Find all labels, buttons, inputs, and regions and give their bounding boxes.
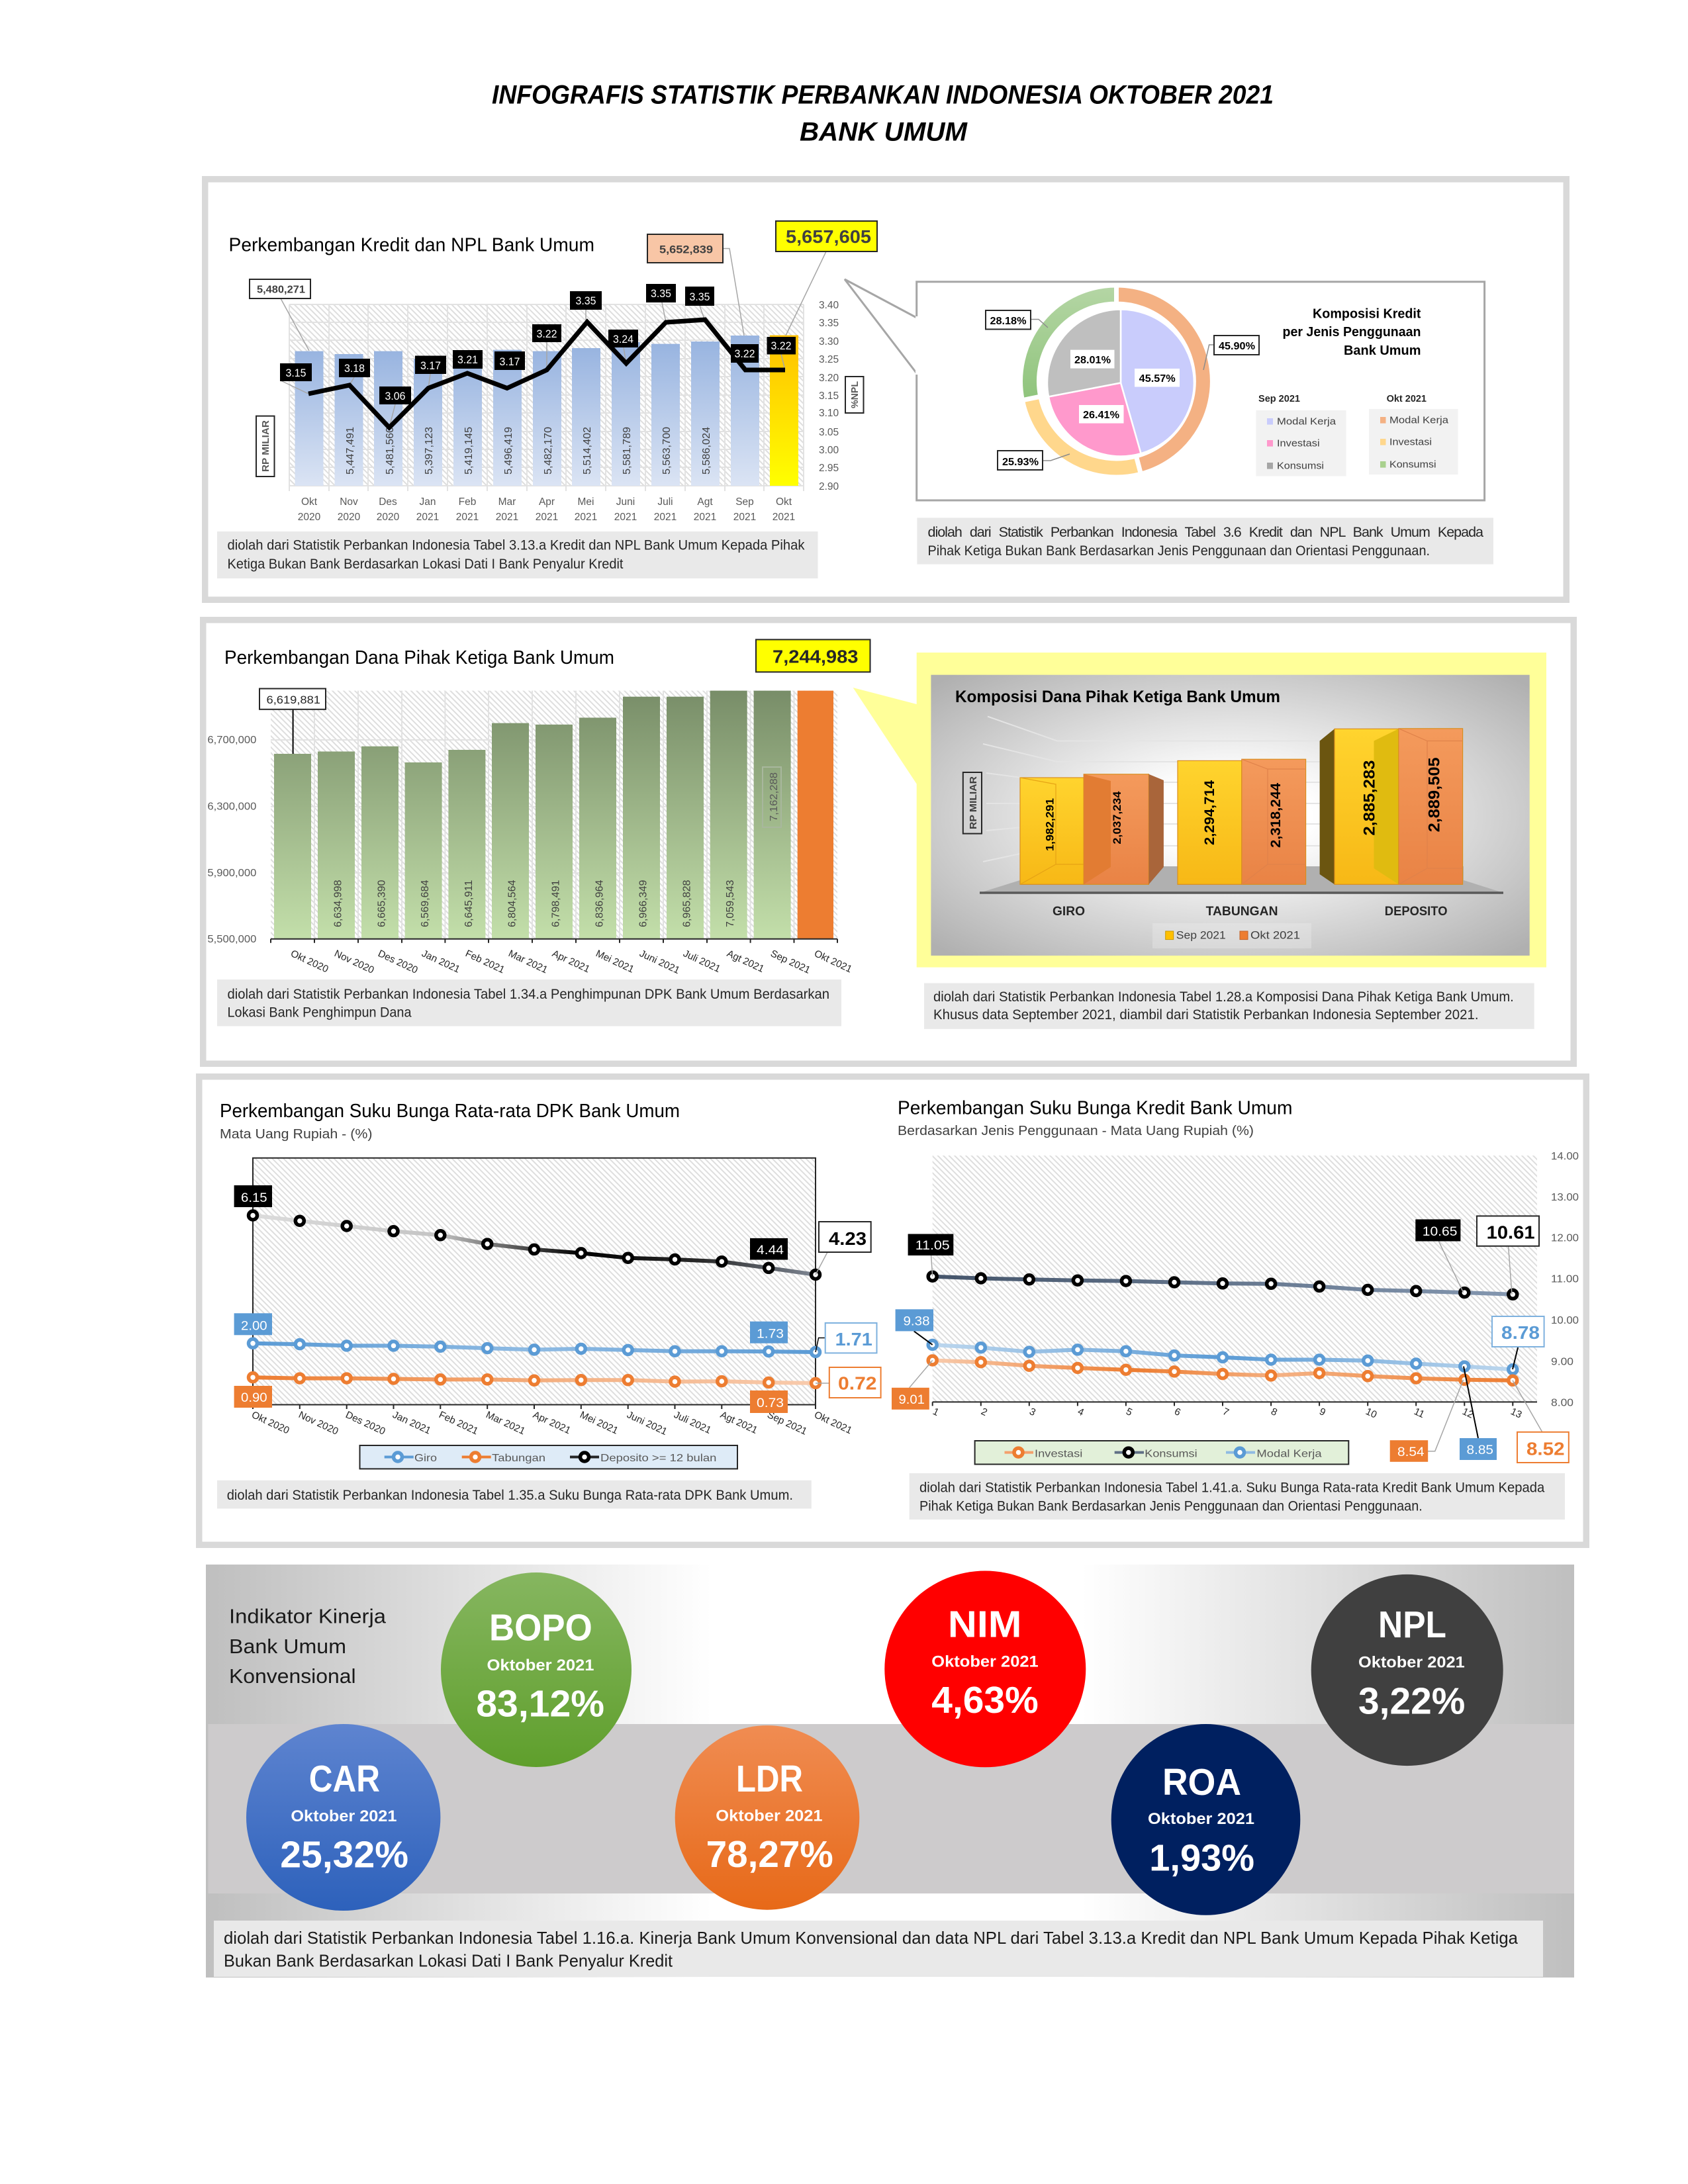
indicator: LDR: [675, 1725, 859, 1910]
data labels: suku bunga kredit: 10.65: [1423, 1225, 1457, 1239]
combo chart: kredit bars and NPL line: 5,419,145: [463, 427, 475, 475]
x axis labels: DPK: Agt 2021: [725, 948, 766, 975]
caption: kredit: diolah dari Statistik Perbankan Indonesia Tabel 3.13.a Kredit dan NPL Bank Umum Kepada Pihak: [228, 537, 805, 553]
indicator: LDR: Oktober 2021: [716, 1807, 823, 1825]
y axis labels: DPK: [207, 735, 257, 945]
heading: komposisi kredit: Bank Umum: [1344, 343, 1421, 358]
x axis month labels: 2021: [536, 512, 558, 523]
callout: 5,480,271: [250, 279, 310, 298]
legend: Sep 2021: Sep 2021: [1258, 394, 1300, 404]
indicator: NPL: [1311, 1574, 1503, 1766]
x axis month labels: Juli: [657, 496, 673, 508]
legend: Sep 2021: Investasi: [1277, 439, 1320, 449]
callout: 6,619,881: [259, 688, 326, 754]
data labels: suku bunga kredit: 9.01: [899, 1393, 925, 1407]
heading: suku bunga DPK: Perkembangan Suku Bunga Rata-rata DPK Bank Umum: [220, 1101, 680, 1122]
y axis labels: suku bunga kredit: [1551, 1151, 1579, 1408]
right axis labels: NPL: 2.95: [819, 463, 839, 474]
indicator: BOPO: Oktober 2021: [487, 1657, 594, 1674]
line chart: suku bunga DPK: Sep 2021: [765, 1409, 809, 1437]
combo chart: kredit bars and NPL line: 5,481,560: [385, 427, 396, 475]
x axis labels: DPK: Mar 2021: [506, 948, 549, 976]
line chart: suku bunga DPK: Des 2020: [344, 1409, 387, 1437]
data labels: suku bunga DPK: 2.00: [241, 1320, 267, 1334]
heading: komposisi kredit: Komposisi Kredit: [1313, 306, 1421, 321]
legend: Okt 2021: Investasi: [1389, 437, 1432, 448]
axis title: RP MILIAR: [256, 416, 274, 477]
x axis month labels: Juni: [616, 496, 635, 508]
callout panel: komposisi kredit: [845, 279, 1485, 500]
x axis labels: DPK: Okt 2020: [289, 948, 330, 975]
line chart: suku bunga DPK: Mar 2021: [484, 1409, 527, 1437]
indicator: CAR: [246, 1724, 440, 1911]
x axis month labels: Okt: [301, 496, 318, 508]
x axis month labels: Feb: [459, 496, 476, 508]
bar values: 2,885,283: [1360, 760, 1378, 836]
data labels: suku bunga DPK: 0.72: [838, 1373, 876, 1394]
callout: 5,480,271: 5,480,271: [257, 285, 305, 295]
caption: DPK: [217, 979, 841, 1026]
x axis month labels: Mar: [498, 496, 516, 508]
legend: Sep 2021: [1256, 394, 1346, 477]
x axis month labels: Nov: [340, 496, 358, 508]
indicator: NIM: Oktober 2021: [931, 1653, 1039, 1671]
right axis labels: NPL: 2.90: [819, 481, 839, 492]
x axis month labels: 2021: [575, 512, 597, 523]
line chart: suku bunga kredit: 3: [1027, 1406, 1037, 1418]
bar chart: DPK: 6,634,998: [332, 880, 344, 927]
bar chart: DPK: 6,965,828: [682, 880, 692, 927]
donut chart: Okt 2021: [1021, 285, 1212, 477]
panel: indikator kinerja: [206, 1565, 1574, 1978]
panel: suku bunga: [199, 1077, 1586, 1545]
callout: 5,657,605: 5,657,605: [786, 226, 871, 247]
indicator: NPL: 3,22%: [1358, 1680, 1465, 1722]
combo chart: kredit bars and NPL line: 3.22: [536, 328, 557, 340]
bar chart: DPK: 6,966,349: [638, 880, 649, 927]
combo chart: kredit bars and NPL line: 3.22: [735, 348, 755, 360]
indicator: NPL: Oktober 2021: [1358, 1653, 1465, 1672]
indicator: CAR: 25,32%: [280, 1834, 408, 1876]
indicator: ROA: 1,93%: [1149, 1837, 1254, 1879]
line chart: suku bunga DPK: Jan 2021: [391, 1409, 432, 1437]
indicator: BOPO: 83,12%: [476, 1683, 604, 1725]
axis title: RP MILIAR: [963, 772, 982, 834]
x axis labels: DPK: Jan 2021: [420, 948, 461, 976]
line chart: suku bunga DPK: Okt 2020: [250, 1409, 291, 1436]
heading: suku bunga kredit: [898, 1098, 1292, 1138]
line chart: suku bunga DPK: Mei 2021: [578, 1409, 620, 1437]
callout: 7,244,983: 7,244,983: [773, 646, 858, 667]
heading: suku bunga DPK: [220, 1101, 680, 1142]
combo chart: kredit bars and NPL line: [280, 249, 826, 491]
right axis labels: NPL: 3.25: [819, 354, 839, 365]
bar values: [1044, 757, 1444, 851]
bar values: 2,318,244: [1268, 783, 1284, 848]
main title: INFOGRAFIS STATISTIK PERBANKAN INDONESIA OKTOBER 2021: [492, 81, 1274, 110]
legend: DPK composition: [1152, 923, 1311, 948]
indicator: BOPO: BOPO: [489, 1607, 592, 1649]
right axis labels: NPL: 3.15: [819, 390, 839, 402]
category labels: GIRO: [1053, 905, 1085, 919]
main title: [492, 81, 1274, 147]
combo chart: kredit bars and NPL line: 3.35: [576, 295, 596, 307]
x axis month labels: 2020: [298, 512, 321, 523]
TABUNGAN bars: [1178, 759, 1306, 884]
data labels: suku bunga kredit: [892, 1216, 1569, 1463]
x axis month labels: Mei: [578, 496, 594, 508]
indicator: NPL: NPL: [1378, 1604, 1446, 1646]
line chart: suku bunga kredit: 1: [931, 1406, 941, 1418]
axis title: %NPL: [845, 377, 863, 413]
legend: suku bunga kredit: Investasi: [1035, 1448, 1082, 1460]
x axis month labels: Apr: [539, 496, 555, 508]
heading: indikator kinerja: Konvensional: [229, 1664, 356, 1688]
heading: komposisi kredit: [1283, 306, 1421, 358]
y axis labels: DPK: 6,700,000: [207, 735, 257, 746]
3D bar chart: komposisi DPK: [980, 717, 1503, 893]
bar chart: DPK: 7,059,543: [725, 880, 736, 927]
combo chart: kredit bars and NPL line: 5,447,491: [345, 427, 356, 475]
x axis month labels: 2021: [694, 512, 716, 523]
right axis labels: NPL: 3.10: [819, 408, 839, 419]
x axis labels: DPK: Juni 2021: [637, 948, 681, 976]
caption: kredit: [217, 531, 818, 578]
line chart: suku bunga DPK: [249, 1158, 854, 1437]
combo chart: kredit bars and NPL line: 3.17: [499, 356, 520, 368]
heading: indikator kinerja: Indikator Kinerja: [229, 1605, 387, 1628]
data labels: suku bunga kredit: 11.05: [915, 1239, 950, 1253]
combo chart: kredit bars and NPL line: 3.15: [286, 367, 306, 379]
heading: komposisi kredit: per Jenis Penggunaan: [1283, 325, 1421, 340]
legend: suku bunga DPK: Deposito >= 12 bulan: [600, 1453, 716, 1464]
combo chart: kredit bars and NPL line: 3.35: [651, 288, 671, 300]
line chart: suku bunga DPK: Juni 2021: [625, 1409, 669, 1437]
series: giro: [249, 1339, 820, 1357]
heading: komposisi DPK: Komposisi Dana Pihak Ketiga Bank Umum: [955, 688, 1280, 706]
x axis month labels: Agt: [697, 496, 713, 508]
callout: 5,652,839: [647, 234, 723, 263]
y axis labels: DPK: 5,500,000: [207, 934, 257, 945]
heading: dana pihak ketiga: Perkembangan Dana Pihak Ketiga Bank Umum: [224, 647, 614, 668]
line chart: suku bunga kredit: 11: [1412, 1406, 1427, 1420]
combo chart: kredit bars and NPL line: 3.24: [613, 334, 633, 345]
caption: DPK: diolah dari Statistik Perbankan Indonesia Tabel 1.34.a Penghimpunan DPK Bank Umum Berdasarkan: [228, 986, 829, 1002]
caption: komposisi DPK: [924, 983, 1534, 1029]
indicator: ROA: ROA: [1162, 1761, 1241, 1803]
pie labels: 28.18%: [990, 316, 1026, 327]
line chart: suku bunga kredit: 9: [1317, 1406, 1327, 1418]
caption: kredit: Ketiga Bukan Bank Berdasarkan Lokasi Dati I Bank Penyalur Kredit: [228, 556, 624, 572]
panel: kredit dan NPL: [205, 179, 1566, 600]
y axis labels: suku bunga kredit: 13.00: [1551, 1192, 1579, 1203]
data labels: suku bunga DPK: 1.71: [835, 1329, 872, 1349]
data labels: suku bunga kredit: 8.85: [1467, 1443, 1493, 1457]
y axis labels: suku bunga kredit: 14.00: [1551, 1151, 1579, 1162]
combo chart: kredit bars and NPL line: 3.18: [344, 363, 365, 375]
x axis labels: DPK: Juli 2021: [681, 948, 722, 975]
caption: suku bunga kredit: diolah dari Statistik Perbankan Indonesia Tabel 1.41.a. Suku Bunga Rata-rata Kredit Bank Umum Kepada: [919, 1480, 1544, 1496]
line chart: suku bunga DPK: Feb 2021: [437, 1409, 480, 1437]
caption: komposisi DPK: diolah dari Statistik Perbankan Indonesia Tabel 1.28.a Komposisi Dana Pihak Ketiga Bank Umum.: [933, 989, 1514, 1005]
x axis month labels: Okt: [776, 496, 792, 508]
line chart: suku bunga kredit: 6: [1172, 1406, 1182, 1418]
caption: komposisi kredit: [917, 518, 1493, 565]
x axis labels: DPK: [289, 948, 854, 976]
data labels: suku bunga DPK: 6.15: [241, 1191, 267, 1205]
category labels: TABUNGAN: [1206, 905, 1278, 919]
line chart: suku bunga DPK: Apr 2021: [531, 1409, 573, 1436]
bar chart: DPK: 6,836,964: [594, 880, 605, 927]
bar values: 2,037,234: [1111, 791, 1123, 844]
axis title: %NPL: %NPL: [850, 381, 861, 408]
legend: suku bunga kredit: Konsumsi: [1145, 1448, 1197, 1460]
combo chart: kredit bars and NPL line: 3.06: [385, 390, 405, 402]
line chart: suku bunga DPK: Juli 2021: [672, 1409, 713, 1436]
callout: 6,619,881: 6,619,881: [266, 694, 320, 706]
legend: suku bunga DPK: [360, 1445, 737, 1469]
bar chart: DPK: 7,162,288: [769, 772, 780, 821]
right axis labels: NPL: 3.40: [819, 300, 839, 311]
legend: Sep 2021: Konsumsi: [1277, 461, 1324, 472]
line chart: suku bunga kredit: 10: [1364, 1406, 1379, 1421]
right axis labels: NPL: 3.00: [819, 445, 839, 456]
y axis labels: DPK: 5,900,000: [207, 868, 257, 879]
combo chart: kredit bars and NPL line: 5,563,700: [661, 427, 673, 475]
x axis month labels: 2021: [654, 512, 677, 523]
right axis labels: NPL: [819, 300, 839, 492]
line chart: suku bunga kredit: 8: [1269, 1406, 1279, 1418]
data labels: suku bunga DPK: 4.44: [757, 1244, 784, 1257]
heading: suku bunga DPK: Mata Uang Rupiah - (%): [220, 1127, 372, 1142]
x axis month labels: 2021: [733, 512, 756, 523]
x axis month labels: 2021: [456, 512, 479, 523]
legend: suku bunga DPK: Giro: [414, 1453, 437, 1464]
caption: suku bunga DPK: [217, 1480, 812, 1509]
bar values: 1,982,291: [1044, 798, 1056, 851]
category labels: DEPOSITO: [1385, 905, 1447, 919]
heading: indikator kinerja: Bank Umum: [229, 1635, 346, 1658]
indicator: NIM: 4,63%: [931, 1679, 1039, 1721]
callout: 7,244,983: [756, 639, 870, 672]
y axis labels: suku bunga kredit: 11.00: [1551, 1273, 1579, 1285]
data labels: suku bunga kredit: 8.78: [1501, 1322, 1540, 1343]
bar chart: DPK: 6,798,491: [551, 880, 561, 927]
combo chart: kredit bars and NPL line: 5,397,123: [424, 427, 435, 475]
bar chart: DPK: 6,665,390: [376, 880, 388, 927]
series: deposito: [249, 1211, 820, 1279]
caption: indikator kinerja: diolah dari Statistik Perbankan Indonesia Tabel 1.16.a. Kinerja Bank Umum Konvensional dan data NPL dari Tabel 3.13.a Kredit dan NPL Bank Umum Kepada Pihak Ketiga: [224, 1928, 1519, 1948]
series: konsumsi: [928, 1272, 1517, 1298]
data labels: suku bunga kredit: 8.52: [1526, 1438, 1565, 1459]
y axis labels: suku bunga kredit: 8.00: [1551, 1397, 1573, 1408]
combo chart: kredit bars and NPL line: 3.35: [690, 291, 710, 303]
axis title: RP MILIAR: RP MILIAR: [261, 420, 271, 472]
indicator: LDR: LDR: [736, 1758, 803, 1800]
pie labels: 26.41%: [1083, 410, 1119, 421]
legend: Okt 2021: [1369, 394, 1458, 475]
x axis labels: DPK: Feb 2021: [463, 948, 506, 976]
caption: indikator kinerja: Bukan Bank Berdasarkan Lokasi Dati I Bank Penyalur Kredit: [224, 1951, 673, 1971]
bar chart: DPK: 6,804,564: [507, 880, 518, 927]
legend: Okt 2021: Modal Kerja: [1389, 416, 1449, 426]
combo chart: kredit bars and NPL line: 3.17: [420, 360, 441, 372]
legend: DPK composition: Sep 2021: [1176, 930, 1226, 942]
category labels: [1053, 905, 1447, 919]
y axis labels: suku bunga kredit: 10.00: [1551, 1315, 1579, 1326]
y axis labels: suku bunga kredit: 9.00: [1551, 1356, 1573, 1367]
x axis labels: DPK: Des 2020: [376, 948, 420, 976]
combo chart: kredit bars and NPL line: 3.21: [457, 354, 478, 366]
data labels: suku bunga DPK: 0.73: [757, 1396, 784, 1410]
line chart: suku bunga DPK: Nov 2020: [297, 1409, 340, 1437]
DEPOSITO bars: [1320, 729, 1463, 884]
right axis labels: NPL: 3.20: [819, 373, 839, 384]
combo chart: kredit bars and NPL line: 3.22: [771, 340, 792, 352]
legend: Sep 2021: Modal Kerja: [1277, 417, 1336, 428]
heading: indikator kinerja: [229, 1605, 387, 1688]
right axis labels: NPL: 3.05: [819, 427, 839, 438]
callout: 5,652,839: 5,652,839: [659, 244, 713, 255]
bar values: 2,294,714: [1202, 780, 1217, 845]
x axis labels: DPK: Apr 2021: [550, 948, 592, 975]
right axis labels: NPL: 3.30: [819, 336, 839, 347]
data labels: suku bunga kredit: 8.54: [1397, 1445, 1425, 1459]
line chart: suku bunga kredit: 13: [1509, 1406, 1524, 1421]
data labels: suku bunga DPK: 1.73: [757, 1328, 784, 1341]
data labels: suku bunga kredit: 9.38: [903, 1315, 929, 1329]
x axis month labels: 2021: [416, 512, 439, 523]
pie labels: 45.90%: [1219, 341, 1255, 352]
series: investasi: [928, 1356, 1517, 1385]
legend: Okt 2021: Konsumsi: [1389, 459, 1436, 470]
line chart: suku bunga kredit: [910, 1156, 1542, 1451]
legend: DPK composition: Okt 2021: [1250, 930, 1300, 942]
bar chart: DPK: 6,569,684: [420, 880, 431, 927]
x axis labels: DPK: Okt 2021: [812, 948, 854, 975]
callout panel: komposisi DPK: [853, 653, 1546, 968]
data labels: suku bunga DPK: [234, 1185, 881, 1413]
data labels: suku bunga DPK: 4.23: [829, 1228, 867, 1249]
x axis month labels: 2021: [773, 512, 795, 523]
x axis month labels: 2020: [338, 512, 361, 523]
y axis labels: suku bunga kredit: 12.00: [1551, 1232, 1579, 1244]
bar chart: DPK: [271, 691, 837, 943]
combo chart: kredit bars and NPL line: 5,496,419: [503, 427, 514, 475]
line chart: suku bunga kredit: 7: [1221, 1406, 1231, 1418]
panel: dana pihak ketiga: [203, 620, 1573, 1064]
data labels: suku bunga kredit: 10.61: [1487, 1222, 1535, 1242]
right axis labels: NPL: 3.35: [819, 318, 839, 329]
axis title: RP MILIAR: RP MILIAR: [968, 776, 979, 829]
legend: suku bunga kredit: Modal Kerja: [1256, 1448, 1322, 1460]
indicator: BOPO: [441, 1572, 632, 1767]
indicator: NIM: [884, 1571, 1086, 1767]
pie labels: [986, 310, 1259, 470]
x axis labels: DPK: Nov 2020: [332, 948, 376, 976]
caption: komposisi kredit: diolah dari Statistik Perbankan Indonesia Tabel 3.6 Kredit dan NPL Bank Umum Kepada: [928, 524, 1483, 540]
caption: DPK: Lokasi Bank Penghimpun Dana: [228, 1005, 412, 1021]
x axis month labels: 2021: [614, 512, 637, 523]
legend: suku bunga kredit: [975, 1441, 1348, 1464]
y axis labels: DPK: 6,300,000: [207, 801, 257, 813]
combo chart: kredit bars and NPL line: 5,586,024: [701, 427, 712, 475]
x axis month labels: Jan: [420, 496, 436, 508]
caption: suku bunga kredit: Pihak Ketiga Bukan Bank Berdasarkan Jenis Penggunaan dan Orientasi Penggunaan.: [919, 1498, 1423, 1514]
x axis month labels: 2020: [377, 512, 400, 523]
pie labels: 45.57%: [1139, 373, 1176, 385]
main title: BANK UMUM: [800, 118, 968, 147]
x axis labels: DPK: Sep 2021: [769, 948, 812, 976]
line chart: suku bunga DPK: Okt 2021: [812, 1409, 854, 1436]
x axis labels: DPK: Mei 2021: [594, 948, 635, 976]
line chart: suku bunga kredit: 4: [1076, 1406, 1086, 1418]
heading: suku bunga kredit: Perkembangan Suku Bunga Kredit Bank Umum: [898, 1098, 1292, 1119]
line chart: suku bunga kredit: 5: [1124, 1406, 1134, 1418]
caption: komposisi DPK: Khusus data September 2021, diambil dari Statistik Perbankan Indonesia September 2021.: [933, 1007, 1479, 1023]
heading: kredit dan NPL: Perkembangan Kredit dan NPL Bank Umum: [229, 235, 594, 256]
bar chart: DPK: 6,645,911: [463, 880, 475, 927]
series: modal kerja: [928, 1341, 1517, 1374]
bar values: 2,889,505: [1426, 757, 1444, 832]
legend: suku bunga DPK: Tabungan: [492, 1453, 545, 1464]
callout: 5,657,605: [776, 221, 877, 251]
pie chart: Sep 2021: [1047, 310, 1194, 456]
indicator: LDR: 78,27%: [706, 1833, 833, 1876]
line chart: suku bunga kredit: 2: [979, 1406, 989, 1418]
pie labels: 25.93%: [1002, 457, 1039, 468]
series: tabungan: [249, 1373, 820, 1387]
indicator: CAR: CAR: [309, 1758, 380, 1800]
x axis month labels: Des: [379, 496, 397, 508]
caption: suku bunga kredit: [910, 1473, 1565, 1520]
caption: komposisi kredit: Pihak Ketiga Bukan Bank Berdasarkan Jenis Penggunaan dan Orientasi Penggunaan.: [928, 543, 1430, 559]
line chart: suku bunga kredit: 12: [1460, 1406, 1476, 1421]
x axis month labels: [298, 496, 795, 523]
indicator: ROA: Oktober 2021: [1148, 1810, 1254, 1828]
legend: Okt 2021: Okt 2021: [1387, 394, 1427, 404]
combo chart: kredit bars and NPL line: 5,514,402: [582, 427, 593, 475]
caption: suku bunga DPK: diolah dari Statistik Perbankan Indonesia Tabel 1.35.a Suku Bunga Rata-rata DPK Bank Umum.: [227, 1487, 793, 1503]
indicator: NIM: NIM: [948, 1604, 1021, 1646]
x axis month labels: Sep: [735, 496, 754, 508]
x axis month labels: 2021: [496, 512, 518, 523]
combo chart: kredit bars and NPL line: 5,482,170: [543, 427, 554, 475]
GIRO bars: [1020, 774, 1164, 884]
line chart: suku bunga DPK: Agt 2021: [718, 1409, 759, 1436]
data labels: suku bunga DPK: 0.90: [241, 1391, 267, 1405]
pie labels: 28.01%: [1074, 355, 1111, 366]
caption: indikator kinerja: [214, 1921, 1543, 1977]
indicator: CAR: Oktober 2021: [291, 1807, 397, 1825]
indicator: ROA: [1111, 1724, 1300, 1915]
combo chart: kredit bars and NPL line: 5,581,789: [622, 427, 633, 475]
heading: suku bunga kredit: Berdasarkan Jenis Penggunaan - Mata Uang Rupiah (%): [898, 1124, 1254, 1138]
